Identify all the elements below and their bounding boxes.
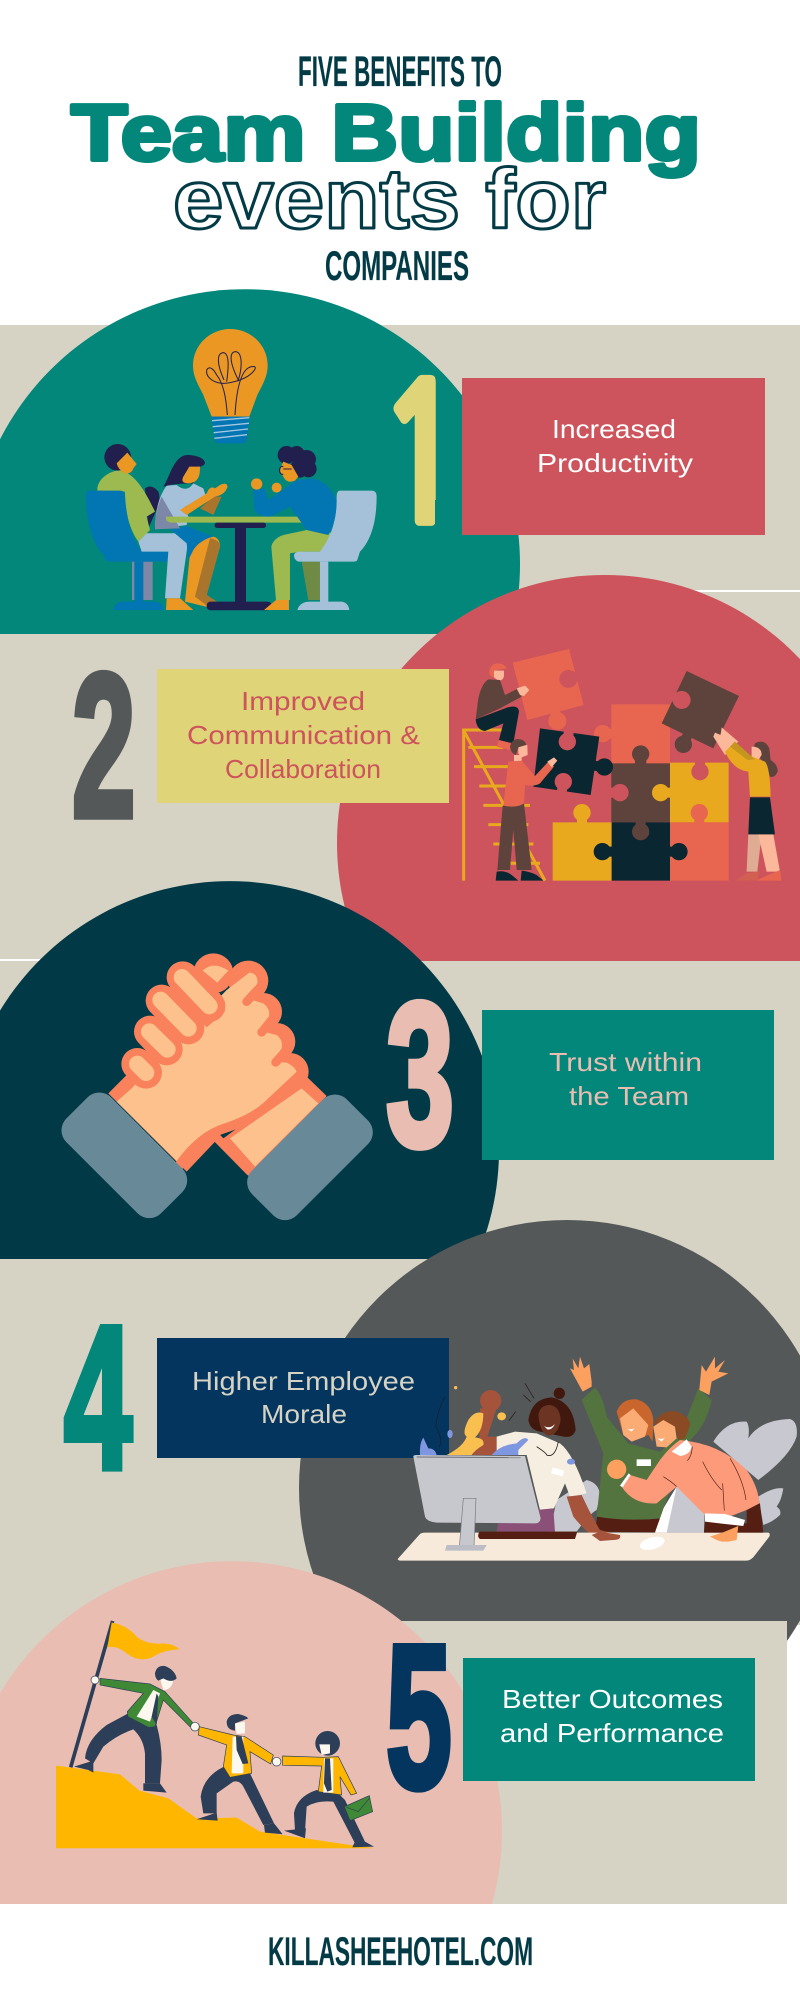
box: increased productivity: Increased [552,414,676,444]
pink dome [0,1561,502,1904]
panel 1: increased productivity [0,289,765,634]
navy dome [0,881,499,1259]
panel 2: improved communication and collaboration [72,575,800,961]
illustration: team at table [86,444,377,610]
title: five benefits to: FIVE BENEFITS TO [298,48,502,96]
panel 5: better outcomes and performance [0,1561,787,1904]
box: better outcomes [463,1658,755,1781]
illustration: cheering coworkers [398,1357,797,1561]
panel 3: trust within the team [0,881,774,1259]
red dome [337,575,800,961]
illustration: puzzle team [462,649,782,881]
title: team building: Team Building [71,88,701,177]
box: better outcomes: Better Outcomes [502,1684,723,1714]
box: improved communication: Communication & [187,720,420,750]
number 3: 3 [386,961,454,1189]
box: improved communication: Collaboration [225,754,381,784]
grey dome [299,1220,800,1756]
title: events for: events for [173,152,606,246]
title block [71,48,701,289]
box: increased productivity [462,378,765,535]
box: increased productivity: Productivity [537,448,693,478]
box: improved communication [157,669,449,803]
icon: light bulb [193,329,268,443]
box: improved communication: Improved [241,686,365,716]
number 2: 2 [72,632,136,860]
number 4: 4 [64,1284,132,1512]
teal dome [0,289,520,634]
box: better outcomes: and Performance [500,1718,724,1748]
panel 4: higher employee morale [64,1220,800,1756]
box: higher employee morale [157,1338,449,1458]
number 5: 5 [386,1603,452,1831]
icon: clasped hands [55,953,380,1227]
box: higher employee morale: Higher Employee [192,1366,415,1396]
number 1: 1 [377,364,467,551]
title: companies: COMPANIES [325,242,469,289]
box: trust within the team [482,1010,774,1160]
box: trust within the team: the Team [569,1081,689,1111]
illustration: climbing team [56,1621,375,1848]
box: trust within the team: Trust within [549,1047,702,1077]
beige background band [0,325,800,1625]
box: higher employee morale: Morale [261,1399,347,1429]
beige lower band [0,1621,787,1904]
footer website: KILLASHEEHOTEL.COM [268,1930,533,1974]
